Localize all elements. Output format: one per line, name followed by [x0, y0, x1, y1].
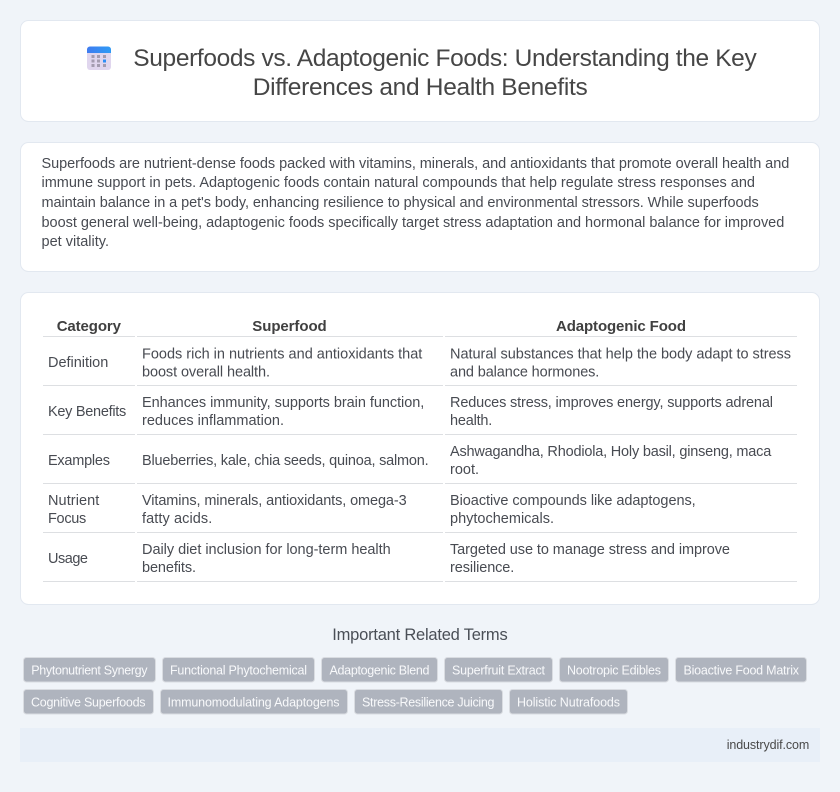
panel: comparison table — [20, 292, 820, 604]
row: usage: resilience. — [450, 560, 514, 576]
panel: introduction text: Superfoods are nutrient-dense foods packed with vitamins, minerals, and antioxidants that promote overall health and — [42, 156, 789, 172]
row: nutrient focus: Bioactive compounds like adaptogens, — [450, 493, 696, 509]
row: examples: Ashwagandha, Rhodiola, Holy basil, ginseng, maca — [450, 444, 772, 460]
row: usage: Targeted use to manage stress and improve — [450, 542, 730, 558]
related term tags — [24, 658, 806, 714]
related term tags: Holistic Nutrafoods — [517, 695, 620, 709]
row: usage: Usage — [48, 551, 88, 567]
row: definition: Definition — [48, 355, 108, 371]
row: key benefits: Reduces stress, improves energy, supports adrenal — [450, 395, 773, 411]
row: nutrient focus — [43, 493, 797, 533]
related term tags: Cognitive Superfoods — [31, 695, 146, 709]
row: key benefits: Enhances immunity, supports brain function, — [142, 395, 424, 411]
row: examples — [43, 444, 797, 484]
related term tags: Stress-Resilience Juicing — [362, 695, 495, 709]
panel: introduction text — [20, 142, 820, 272]
row: definition: boost overall health. — [142, 364, 270, 380]
icon: calendar — [87, 46, 111, 70]
row: key benefits: reduces inflammation. — [142, 413, 284, 429]
heading: important related terms: Important Related Terms — [332, 626, 508, 644]
panel: introduction text: pet vitality. — [42, 234, 109, 250]
related term tags: Functional Phytochemical — [170, 663, 307, 677]
related term tags: Nootropic Edibles — [567, 663, 661, 677]
related term tags: Bioactive Food Matrix — [684, 663, 800, 677]
panel: introduction text: immune support in pets. Adaptogenic foods contain natural compounds that help regulate stress responses and — [42, 175, 755, 191]
row: usage: benefits. — [142, 560, 196, 576]
related term tags: Immunomodulating Adaptogens — [168, 695, 340, 709]
table header row — [43, 318, 797, 337]
row: nutrient focus: Vitamins, minerals, antioxidants, omega-3 — [142, 493, 407, 509]
row: examples: Examples — [48, 453, 110, 469]
row: definition: Foods rich in nutrients and antioxidants that — [142, 346, 422, 362]
row: nutrient focus: Focus — [48, 511, 86, 527]
row: examples: Blueberries, kale, chia seeds, quinoa, salmon. — [142, 453, 429, 469]
row: definition: Natural substances that help the body adapt to stress — [450, 346, 791, 362]
title — [133, 45, 757, 101]
related term tags: Adaptogenic Blend — [330, 663, 430, 677]
row: usage: Daily diet inclusion for long-term health — [142, 542, 391, 558]
row: definition: and balance hormones. — [450, 364, 599, 380]
table header row: Adaptogenic Food — [556, 318, 686, 335]
row: key benefits: Key Benefits — [48, 404, 126, 420]
row: examples: root. — [450, 462, 479, 478]
table header row: Category — [57, 318, 122, 335]
related term tags: Superfruit Extract — [452, 663, 546, 677]
related term tags: Phytonutrient Synergy — [31, 663, 148, 677]
row: key benefits: health. — [450, 413, 492, 429]
row: nutrient focus: fatty acids. — [142, 511, 212, 527]
title: Superfoods vs. Adaptogenic Foods: Understanding the Key — [133, 45, 757, 72]
panel: introduction text: boost general well-being, adaptogenic foods specifically target stress adaptation and hormonal balance for improved — [42, 215, 784, 231]
row: key benefits — [43, 395, 797, 435]
table header row: Superfood — [252, 318, 327, 335]
row: definition — [43, 346, 797, 386]
footer: industrydif.com — [727, 738, 809, 752]
panel: introduction text: maintain balance in a pet's body, enhancing resilience to physical and environmental stressors. While superfoods — [42, 195, 759, 211]
title: Differences and Health Benefits — [253, 74, 588, 101]
row: nutrient focus: Nutrient — [48, 493, 99, 509]
footer — [20, 728, 820, 762]
row: nutrient focus: phytochemicals. — [450, 511, 554, 527]
header panel — [20, 20, 820, 122]
row: usage — [43, 542, 797, 582]
